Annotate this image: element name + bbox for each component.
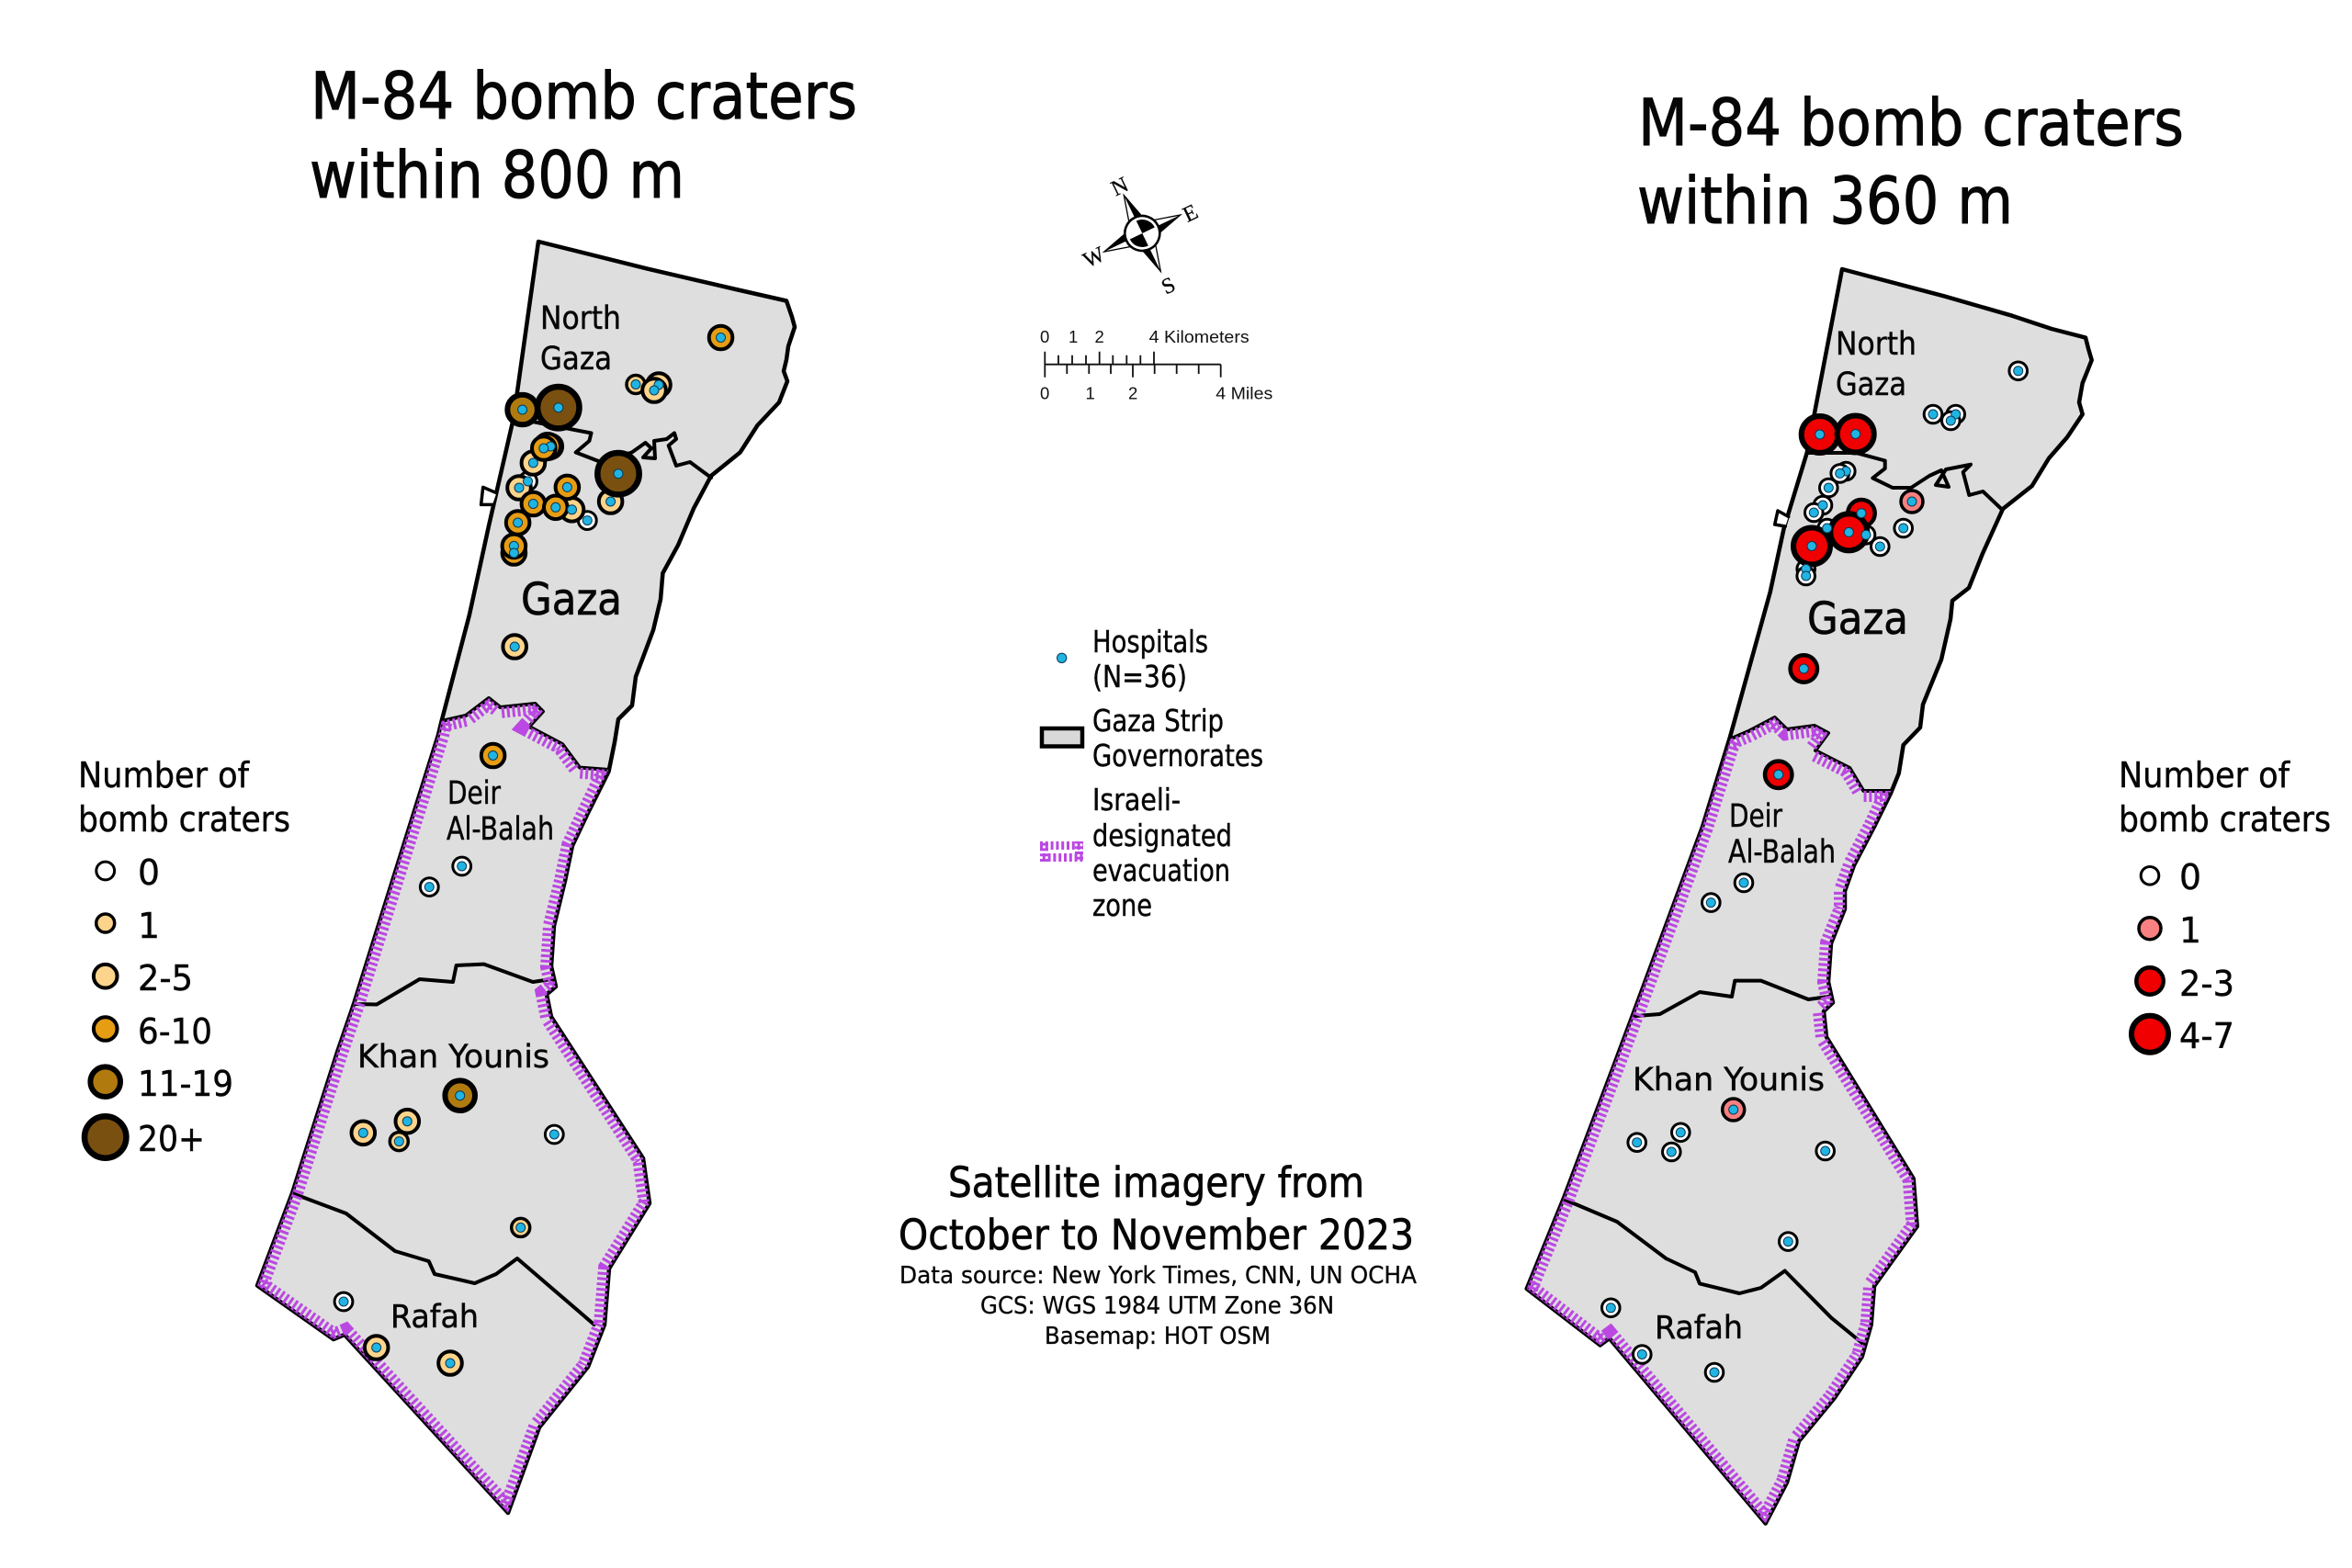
label: hospitals: (N=36) xyxy=(1092,659,1187,694)
governorate labels: Rafah xyxy=(390,1299,479,1336)
governorate boundaries xyxy=(292,418,711,1325)
icon: governorate swatch xyxy=(1042,728,1082,746)
title: 800 m map: M-84 bomb craters xyxy=(311,59,857,134)
label: governorates xyxy=(1092,703,1263,773)
imagery note and sources: Data source: New York Times, CNN, UN OCHA xyxy=(899,1262,1417,1290)
label: governorates: Gaza Strip xyxy=(1092,703,1224,739)
legend: bomb craters 800 m xyxy=(78,755,290,1159)
strip fill: governorates xyxy=(257,242,795,1513)
governorate labels: Gaza xyxy=(1836,367,1906,403)
label: hospitals: Hospitals xyxy=(1092,624,1208,660)
scale bar: 2 xyxy=(1095,327,1104,346)
governorate labels: Gaza xyxy=(521,574,622,626)
title: 360 m map xyxy=(1637,85,2184,239)
title: 800 m map xyxy=(310,59,857,213)
governorate labels: Khan Younis xyxy=(357,1039,549,1076)
imagery note and sources xyxy=(899,1158,1417,1350)
governorate boundaries xyxy=(1564,453,2001,1343)
legend: bomb craters 360 m xyxy=(2119,755,2331,1056)
crater symbols 800 m xyxy=(334,326,732,1375)
scale bar: 2 xyxy=(1128,383,1137,402)
legend: bomb craters 800 m: 11-19 xyxy=(138,1064,233,1104)
governorate labels xyxy=(1633,326,1917,1347)
icon: compass rose xyxy=(1080,173,1202,299)
imagery note and sources: October to November 2023 xyxy=(899,1211,1414,1259)
scale bar: 1 xyxy=(1086,383,1095,402)
label: evacuation zone: evacuation xyxy=(1092,852,1230,888)
strip fill: governorates xyxy=(1527,269,2092,1523)
legend: bomb craters 800 m: 0 xyxy=(138,852,160,893)
imagery note and sources: GCS: WGS 1984 UTM Zone 36N xyxy=(980,1292,1334,1320)
strip outline xyxy=(257,242,795,1513)
governorate labels: Al-Balah xyxy=(447,811,554,848)
scale bar xyxy=(1040,327,1272,402)
governorate labels: Rafah xyxy=(1655,1310,1743,1347)
label: evacuation zone: designated xyxy=(1092,818,1232,853)
governorate labels: North xyxy=(540,300,621,337)
evacuation zone hatching xyxy=(257,698,650,1513)
crater symbols 360 m xyxy=(1602,362,2027,1382)
governorate labels: Deir xyxy=(447,775,501,812)
legend: bomb craters 800 m: 20+ xyxy=(138,1119,205,1159)
port outline xyxy=(1775,511,1789,526)
icon: compass rose: S xyxy=(1158,273,1180,299)
governorate labels: Khan Younis xyxy=(1633,1062,1825,1099)
governorate labels: Deir xyxy=(1729,798,1782,835)
legend: bomb craters 360 m: 0 xyxy=(2179,857,2201,897)
port outline xyxy=(481,487,496,504)
hospital points 800 m xyxy=(339,333,726,1368)
strip outline xyxy=(1527,269,2092,1523)
evacuation zone hatching xyxy=(1527,717,1917,1523)
scale bar: 4 Kilometers xyxy=(1149,327,1250,346)
icon: compass rose: N xyxy=(1107,173,1132,201)
legend: bomb craters 360 m: bomb craters xyxy=(2119,799,2331,840)
legend: bomb craters 800 m: Number of xyxy=(78,755,250,795)
governorate labels xyxy=(357,300,622,1336)
icon: evacuation zone swatch xyxy=(1040,841,1083,862)
label: evacuation zone: zone xyxy=(1092,887,1152,923)
title: 360 m map: M-84 bomb craters xyxy=(1638,85,2184,161)
title: 360 m map: within 360 m xyxy=(1637,164,2013,239)
scale bar: 0 xyxy=(1040,327,1049,346)
legend: bomb craters 800 m: bomb craters xyxy=(78,799,290,840)
label: evacuation zone: Israeli- xyxy=(1092,782,1181,818)
map: craters within 360 m xyxy=(1527,269,2092,1523)
imagery note and sources: Satellite imagery from xyxy=(948,1158,1364,1207)
icon: compass rose: E xyxy=(1180,200,1202,228)
label: governorates: Governorates xyxy=(1092,738,1263,773)
legend: bomb craters 360 m: 1 xyxy=(2179,910,2201,951)
icon: compass rose: W xyxy=(1080,243,1109,273)
title: 800 m map: within 800 m xyxy=(310,138,684,213)
legend: bomb craters 360 m: Number of xyxy=(2119,755,2290,795)
imagery note and sources: Basemap: HOT OSM xyxy=(1045,1323,1271,1350)
legend: bomb craters 800 m: 2-5 xyxy=(138,958,193,998)
scale bar: 1 xyxy=(1069,327,1078,346)
legend: map symbols xyxy=(1040,624,1263,923)
label: evacuation zone xyxy=(1092,782,1232,923)
scale bar: 0 xyxy=(1040,383,1049,402)
label: hospitals xyxy=(1092,624,1208,694)
legend: bomb craters 360 m: 2-3 xyxy=(2179,964,2234,1004)
legend: bomb craters 800 m: 1 xyxy=(138,906,160,946)
scale bar: 4 Miles xyxy=(1216,383,1272,402)
governorate labels: Al-Balah xyxy=(1728,834,1836,871)
governorate labels: Gaza xyxy=(1807,593,1908,645)
icon: hospital point xyxy=(1057,653,1067,663)
map: craters within 800 m xyxy=(257,242,795,1513)
legend: bomb craters 800 m: 6-10 xyxy=(138,1011,212,1052)
legend: bomb craters 360 m: 4-7 xyxy=(2179,1016,2234,1056)
governorate labels: North xyxy=(1836,326,1917,363)
governorate labels: Gaza xyxy=(540,341,612,378)
hospital points 360 m xyxy=(1606,367,2023,1377)
